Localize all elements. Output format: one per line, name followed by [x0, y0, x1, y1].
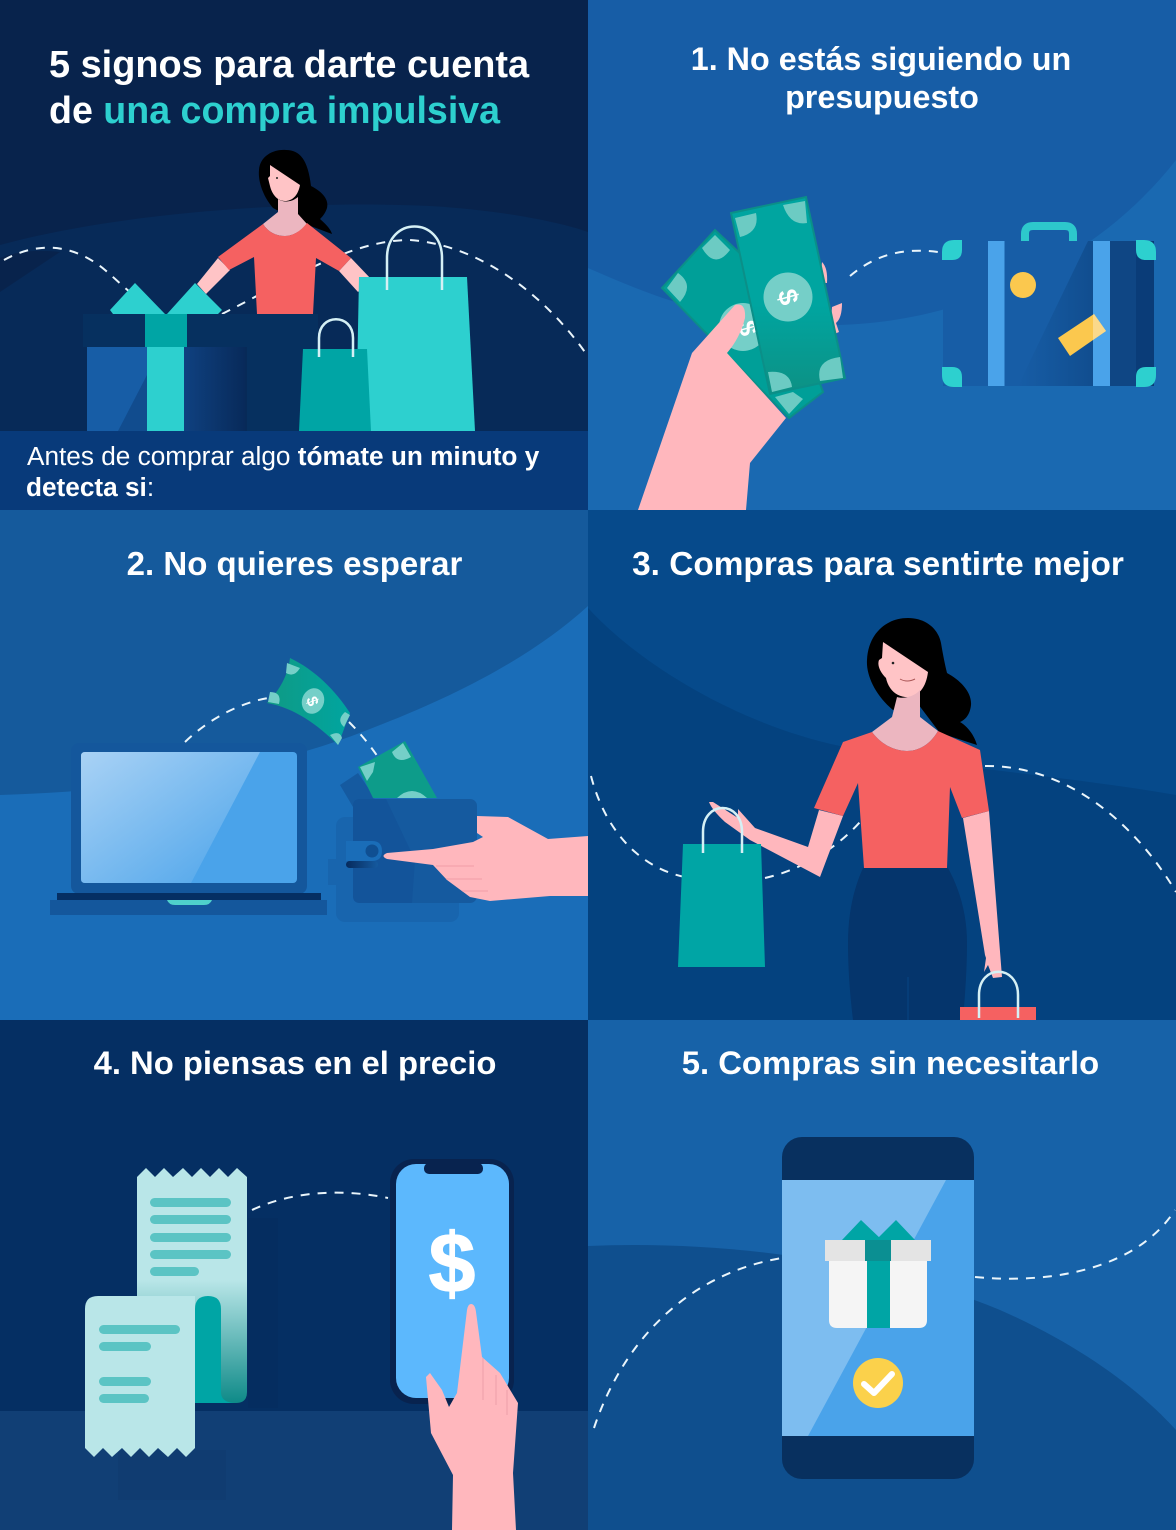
panel: 5 sin necesitarlo	[588, 1020, 1176, 1530]
heading 1: 1. No estás siguiendo un	[691, 41, 1071, 77]
large shopping bag	[356, 226, 475, 431]
panel: intro	[0, 0, 588, 510]
icon: wallet and hand	[328, 741, 588, 922]
intro text: Antes de comprar algo tómate un minuto y	[27, 441, 540, 471]
panel: 3 sentirte mejor	[588, 510, 1176, 1020]
icon: hand with money: $	[772, 286, 804, 308]
icon: teal bag	[678, 808, 765, 967]
heading 4: 4. No piensas en el precio	[94, 1044, 496, 1081]
heading 1	[691, 41, 1071, 115]
title	[49, 44, 530, 131]
icon: laptop	[50, 743, 327, 915]
title: de una compra impulsiva	[49, 89, 501, 131]
icon: hand with money	[638, 197, 845, 510]
heading 5: 5. Compras sin necesitarlo	[682, 1044, 1099, 1081]
icon: flying bill: $	[302, 694, 321, 709]
icon: phone with gift	[782, 1137, 974, 1479]
icon: phone with hand: $	[429, 1216, 475, 1310]
intro text: detecta si:	[26, 472, 154, 502]
icon: suitcase	[942, 226, 1156, 387]
heading 3: 3. Compras para sentirte mejor	[632, 546, 1124, 583]
intro text	[26, 441, 540, 502]
illustration: woman with gifts and bags	[83, 150, 475, 431]
check badge	[853, 1358, 903, 1408]
icon: flying bill	[267, 658, 350, 745]
illustration: woman	[709, 618, 1002, 1020]
heading 2: 2. No quieres esperar	[127, 545, 462, 582]
icon: red bag	[960, 972, 1036, 1020]
small shopping bag	[299, 319, 371, 431]
heading 1: presupuesto	[785, 79, 979, 115]
gift box	[83, 283, 250, 431]
icon: hand with money: $	[732, 317, 764, 339]
title: 5 signos para darte cuenta	[49, 44, 530, 86]
panel: 1 presupuesto	[588, 0, 1176, 510]
icon: phone with hand	[390, 1159, 518, 1530]
gift	[825, 1220, 931, 1328]
panel: 4 precio	[0, 1020, 588, 1530]
panel: 2 no esperar	[0, 510, 588, 1020]
icon: receipts	[85, 1168, 278, 1500]
